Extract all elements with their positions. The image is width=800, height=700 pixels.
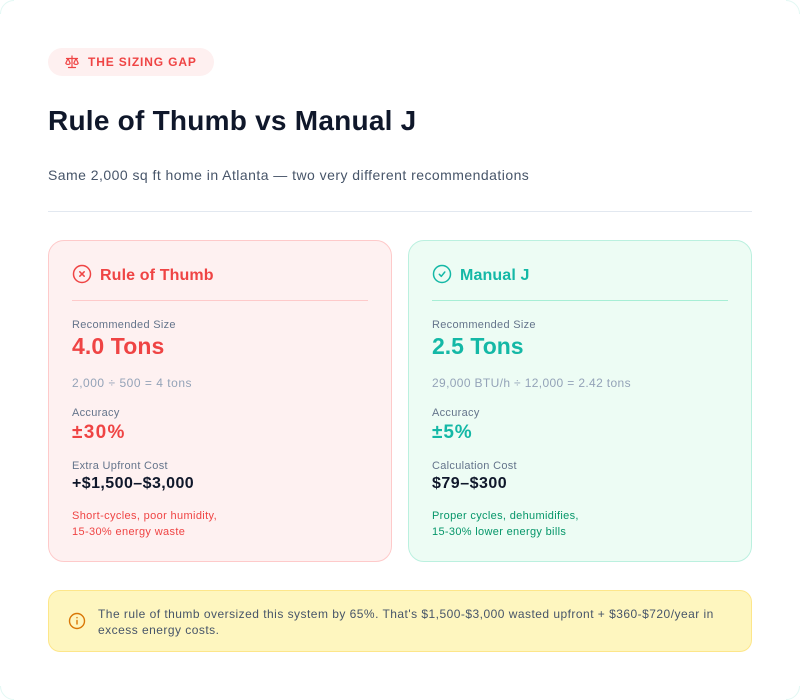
- accuracy value: ±30%: [72, 422, 126, 443]
- benefit note: Proper cycles, dehumidifies,: [432, 510, 579, 522]
- panel: rule of thumb: [48, 240, 392, 562]
- recommended size: Recommended Size: [72, 319, 176, 331]
- accuracy value: ±5%: [432, 422, 473, 443]
- consequence note: [72, 510, 217, 538]
- size value: 4.0 Tons: [72, 333, 164, 359]
- icon: balance scale: [65, 55, 79, 68]
- icon: check circle: [432, 264, 452, 284]
- accuracy label: Accuracy: [432, 407, 480, 419]
- panel: manual j: [408, 240, 752, 562]
- icon: x circle: [72, 264, 92, 284]
- cost value: +$1,500–$3,000: [72, 475, 194, 492]
- callout: [48, 590, 752, 652]
- title: Rule of Thumb vs Manual J: [48, 105, 416, 136]
- cost label: Calculation Cost: [432, 460, 517, 472]
- cost value: $79–$300: [432, 475, 507, 492]
- consequence note: Short-cycles, poor humidity,: [72, 510, 217, 522]
- consequence note: 15-30% energy waste: [72, 526, 185, 538]
- badge: the sizing gap: [48, 48, 214, 76]
- panel heading: Rule of Thumb: [100, 267, 214, 284]
- panel heading: Manual J: [460, 267, 530, 284]
- cost label: Extra Upfront Cost: [72, 460, 168, 472]
- calculation: 2,000 ÷ 500 = 4 tons: [72, 376, 192, 390]
- recommended size: Recommended Size: [432, 319, 536, 331]
- callout text: excess energy costs.: [98, 623, 219, 637]
- subtitle: Same 2,000 sq ft home in Atlanta — two very different recommendations: [48, 167, 529, 183]
- icon: info: [68, 612, 86, 630]
- benefit note: 15-30% lower energy bills: [432, 526, 566, 538]
- benefit note: [432, 510, 579, 538]
- calculation: 29,000 BTU/h ÷ 12,000 = 2.42 tons: [432, 376, 631, 390]
- callout text: The rule of thumb oversized this system by 65%. That's $1,500-$3,000 wasted upfront + $360-$720/year in: [98, 607, 714, 621]
- size value: 2.5 Tons: [432, 333, 524, 359]
- callout text: [98, 607, 714, 637]
- badge label: THE SIZING GAP: [88, 55, 197, 69]
- accuracy label: Accuracy: [72, 407, 120, 419]
